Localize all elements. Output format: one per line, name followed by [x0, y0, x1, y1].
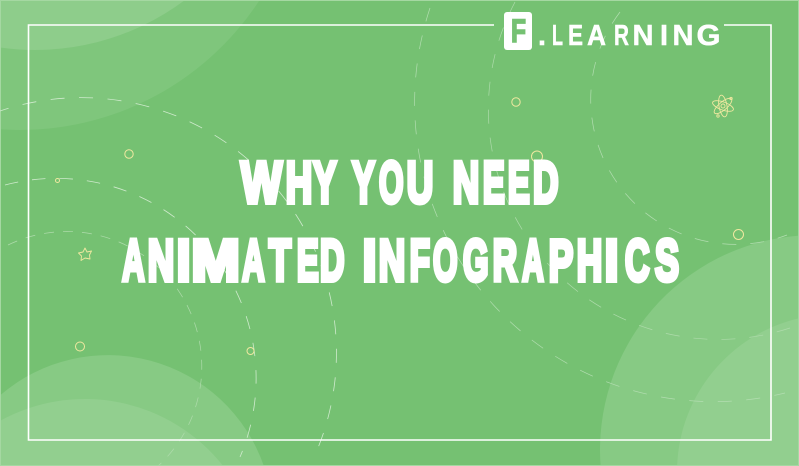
- background circles: bottom right: [600, 236, 799, 466]
- title line 1: N: [453, 150, 479, 216]
- logo wordmark: N: [632, 20, 654, 52]
- icon: star: [78, 248, 92, 260]
- logo wordmark: .: [538, 20, 546, 52]
- icon: atom: [711, 94, 735, 118]
- logo wordmark: G: [696, 20, 720, 52]
- title line 2: M: [192, 228, 240, 294]
- title line 2: N: [148, 228, 174, 294]
- title line 1: Y: [313, 150, 336, 216]
- title line 1: U: [407, 150, 433, 216]
- logo wordmark: N: [672, 20, 694, 52]
- title line 2: R: [493, 228, 517, 294]
- title line 1: H: [286, 150, 312, 216]
- logo: F.LEARNING: [504, 12, 720, 52]
- logo wordmark: R: [614, 20, 629, 52]
- title line 1: E: [508, 150, 530, 216]
- title line 1: O: [379, 150, 404, 216]
- title line 1: Y: [352, 150, 375, 216]
- title line 2: I: [605, 228, 618, 294]
- title line 2: A: [122, 228, 145, 294]
- title line 1: E: [483, 150, 505, 216]
- title line 1: D: [533, 150, 558, 216]
- title: [122, 150, 679, 294]
- logo wordmark: E: [568, 20, 583, 52]
- title line 2: P: [549, 228, 573, 294]
- title line 2: N: [379, 228, 405, 294]
- title line 2: G: [463, 228, 488, 294]
- title line 2: A: [242, 228, 265, 294]
- title line 2: E: [297, 228, 319, 294]
- background circles: top left: [0, 0, 260, 130]
- background circles: bottom left: [0, 355, 264, 466]
- logo badge: [504, 12, 532, 50]
- logo wordmark: I: [660, 20, 668, 52]
- logo wordmark: L: [552, 20, 563, 52]
- title line 2: A: [522, 228, 544, 294]
- title line 2: F: [410, 228, 430, 294]
- title line 2: O: [433, 228, 458, 294]
- title line 2: C: [625, 228, 650, 294]
- logo wordmark: A: [587, 20, 606, 52]
- title line 1: W: [241, 150, 282, 216]
- title line 2: T: [269, 228, 291, 294]
- small ring markers: [56, 98, 744, 355]
- dashed orbit lines: left: [0, 98, 336, 465]
- title line 2: S: [655, 228, 679, 294]
- title line 2: I: [363, 228, 376, 294]
- dashed orbit lines: right: [415, 2, 790, 402]
- title line 2: I: [177, 228, 190, 294]
- title line 2: H: [577, 228, 602, 294]
- title line 2: D: [320, 228, 344, 294]
- logo badge: F: [511, 13, 526, 49]
